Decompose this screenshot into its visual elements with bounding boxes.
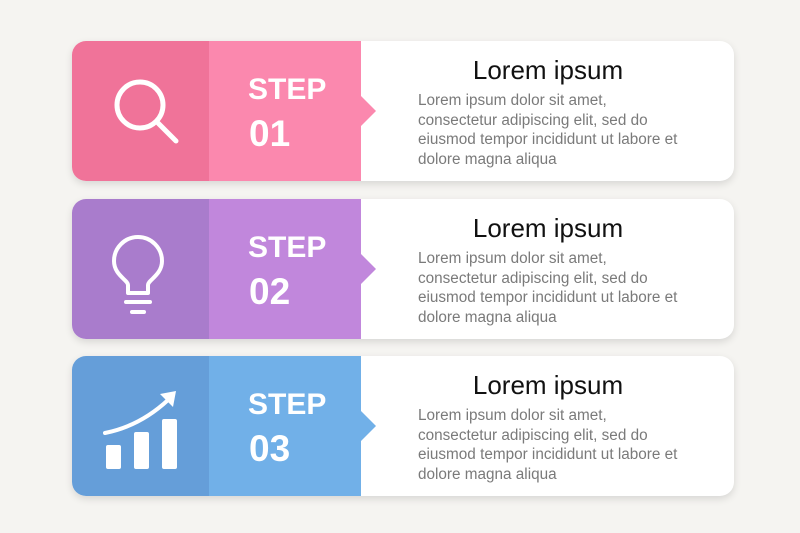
panel: step 01	[72, 41, 734, 181]
text block 3: consectetur adipiscing elit, sed do	[418, 426, 648, 444]
panel: step 01: 01	[249, 113, 290, 154]
panel: step 03	[72, 356, 734, 496]
text block 1	[418, 92, 678, 168]
text block 3: dolore magna aliqua	[418, 466, 557, 482]
text block 1: Lorem ipsum dolor sit amet,	[418, 92, 607, 109]
panel: step 02	[72, 199, 734, 339]
panel: step 02: 02	[249, 271, 290, 312]
heading 3: Lorem ipsum	[473, 370, 623, 400]
icon: light bulb	[112, 235, 164, 314]
heading 2: Lorem ipsum	[473, 213, 623, 243]
text block 1: eiusmod tempor incididunt ut labore et	[418, 131, 677, 148]
step label 02: STEP	[248, 231, 326, 264]
text block 2: consectetur adipiscing elit, sed do	[418, 270, 648, 286]
icon: magnifier	[114, 80, 178, 144]
text block 3: Lorem ipsum dolor sit amet,	[418, 407, 607, 424]
text block 2: Lorem ipsum dolor sit amet,	[418, 250, 607, 267]
text block 2: dolore magna aliqua	[418, 308, 557, 326]
text block 1: dolore magna aliqua	[418, 150, 557, 168]
text block 2	[418, 250, 678, 326]
icon: growth chart	[103, 391, 177, 469]
text block 2: eiusmod tempor incididunt ut labore et	[418, 289, 677, 306]
panel: step 03: 03	[249, 428, 290, 469]
step label 01: STEP	[248, 73, 326, 106]
text block 3	[418, 407, 678, 482]
step label 03: STEP	[248, 388, 326, 421]
heading 1: Lorem ipsum	[473, 55, 623, 85]
text block 1: consectetur adipiscing elit, sed do	[418, 112, 648, 128]
text block 3: eiusmod tempor incididunt ut labore et	[418, 446, 677, 463]
